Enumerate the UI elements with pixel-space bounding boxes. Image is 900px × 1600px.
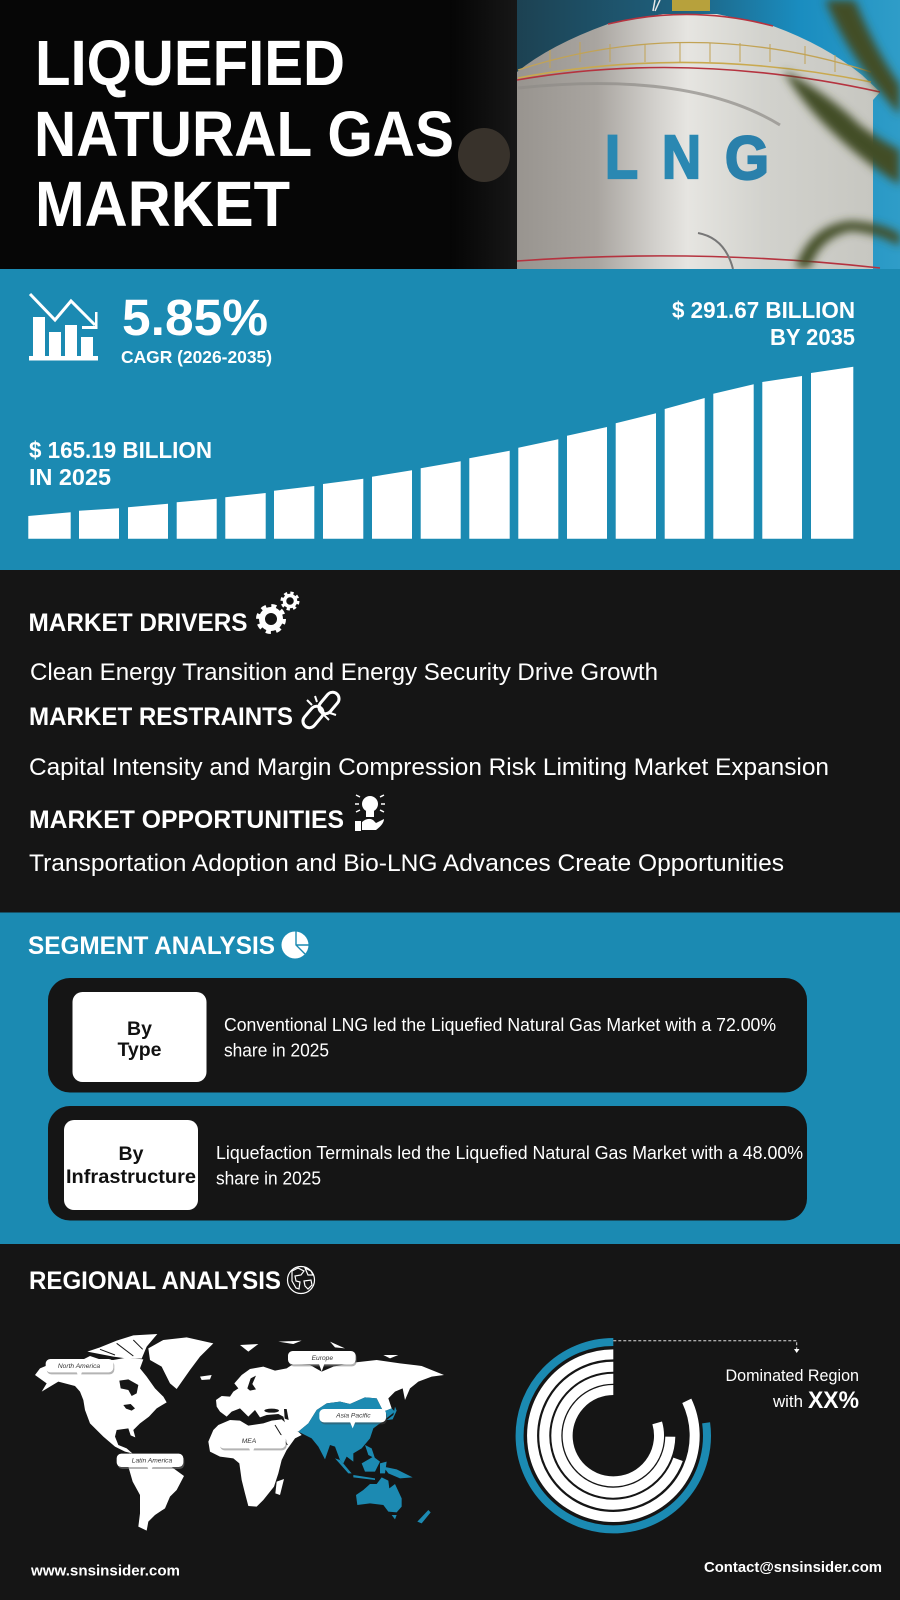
tank lettering: L	[605, 123, 638, 191]
callout: dominated region: Dominated Region	[726, 1367, 859, 1385]
dashed leader arrow	[613, 1341, 800, 1353]
tank lettering	[605, 123, 769, 192]
2025 value: IN 2025	[29, 464, 111, 490]
tank lettering: G	[725, 124, 769, 192]
callout: MEA: MEA	[242, 1438, 257, 1445]
text: by type	[224, 1014, 776, 1060]
icon: globe	[288, 1266, 314, 1294]
text: by type: share in 2025	[224, 1040, 329, 1060]
callout: North America	[46, 1359, 114, 1379]
callout: Europe: Europe	[312, 1355, 333, 1362]
footer contact: Contact@snsinsider.com	[704, 1559, 882, 1576]
Europe and Russia	[216, 1341, 444, 1432]
label box: by infrastructure: Infrastructure	[66, 1166, 196, 1188]
text: by infrastructure: Liquefaction Terminals led the Liquefied Natural Gas Market with a 48.00%	[216, 1142, 803, 1163]
callout: North America: North America	[58, 1363, 100, 1370]
text: drivers: Clean Energy Transition and Energy Security Drive Growth	[30, 659, 658, 686]
label box: by type	[72, 992, 206, 1082]
callout: Asia Pacific	[319, 1409, 387, 1428]
title: LIQUEFIED	[35, 27, 345, 99]
text: by type: Conventional LNG led the Liquefied Natural Gas Market with a 72.00%	[224, 1014, 776, 1035]
icon: chart with downward arrow	[29, 294, 98, 360]
label box: by type: Type	[117, 1039, 162, 1061]
header photo: LNG storage tank	[450, 0, 900, 269]
heading: market opportunities: MARKET OPPORTUNITIES	[29, 806, 344, 834]
2035 value: BY 2035	[770, 324, 855, 350]
panel: segment analysis	[0, 912, 900, 1244]
tank lettering: N	[662, 123, 701, 191]
icon: light bulb in hand	[355, 795, 385, 831]
title: MARKET	[35, 168, 290, 240]
text: by infrastructure	[216, 1142, 803, 1188]
label box: by infrastructure: By	[119, 1143, 144, 1165]
label box: by type: By	[127, 1018, 152, 1040]
panel: regional analysis	[29, 1266, 882, 1580]
heading: market drivers: MARKET DRIVERS	[28, 609, 248, 637]
Latin America	[128, 1453, 184, 1531]
2025 value: $ 165.19 BILLION	[29, 437, 212, 463]
card: by infrastructure	[48, 1106, 807, 1220]
icon: gears	[258, 593, 298, 632]
North America	[35, 1334, 213, 1453]
callout: Latin America	[117, 1454, 184, 1474]
callout: MEA	[219, 1435, 287, 1455]
panel: market dynamics	[0, 570, 900, 913]
2035 value: $ 291.67 BILLION	[672, 297, 855, 323]
header panel	[0, 0, 900, 269]
text: opportunities: Transportation Adoption and Bio-LNG Advances Create Opportunities	[29, 850, 784, 877]
world map	[35, 1334, 444, 1531]
title: NATURAL GAS	[34, 98, 454, 170]
foreground blurred leaves	[783, 0, 900, 268]
Africa and Middle East	[208, 1419, 302, 1507]
icon: broken chain	[300, 690, 342, 730]
callout: dominated region	[726, 1367, 859, 1414]
bar chart: market growth	[28, 367, 853, 539]
callout: dominated region: XX%	[808, 1387, 859, 1414]
CAGR label: CAGR (2026-2035)	[121, 347, 272, 367]
2035 value	[672, 297, 855, 350]
callout: Europe	[288, 1351, 357, 1372]
radial bar chart	[520, 1342, 707, 1529]
CAGR value: 5.85%	[122, 289, 268, 346]
callout: dominated region: with	[772, 1393, 803, 1411]
market size panel	[0, 269, 900, 570]
callout: Asia Pacific: Asia Pacific	[335, 1413, 371, 1420]
heading: market restraints: MARKET RESTRAINTS	[29, 703, 293, 731]
heading: segment analysis: SEGMENT ANALYSIS	[28, 932, 275, 960]
icon: pie chart	[282, 932, 309, 958]
card: by type	[48, 978, 807, 1092]
label box: by infrastructure	[64, 1120, 198, 1210]
Asia Pacific highlighted	[298, 1397, 431, 1523]
2025 value	[29, 437, 212, 490]
heading: regional analysis: REGIONAL ANALYSIS	[29, 1267, 281, 1295]
text: by infrastructure: share in 2025	[216, 1168, 321, 1188]
callout: Latin America: Latin America	[132, 1458, 173, 1465]
footer website: www.snsinsider.com	[30, 1562, 180, 1580]
text: restraints: Capital Intensity and Margin Compression Risk Limiting Market Expansion	[29, 754, 829, 781]
title	[34, 27, 454, 240]
